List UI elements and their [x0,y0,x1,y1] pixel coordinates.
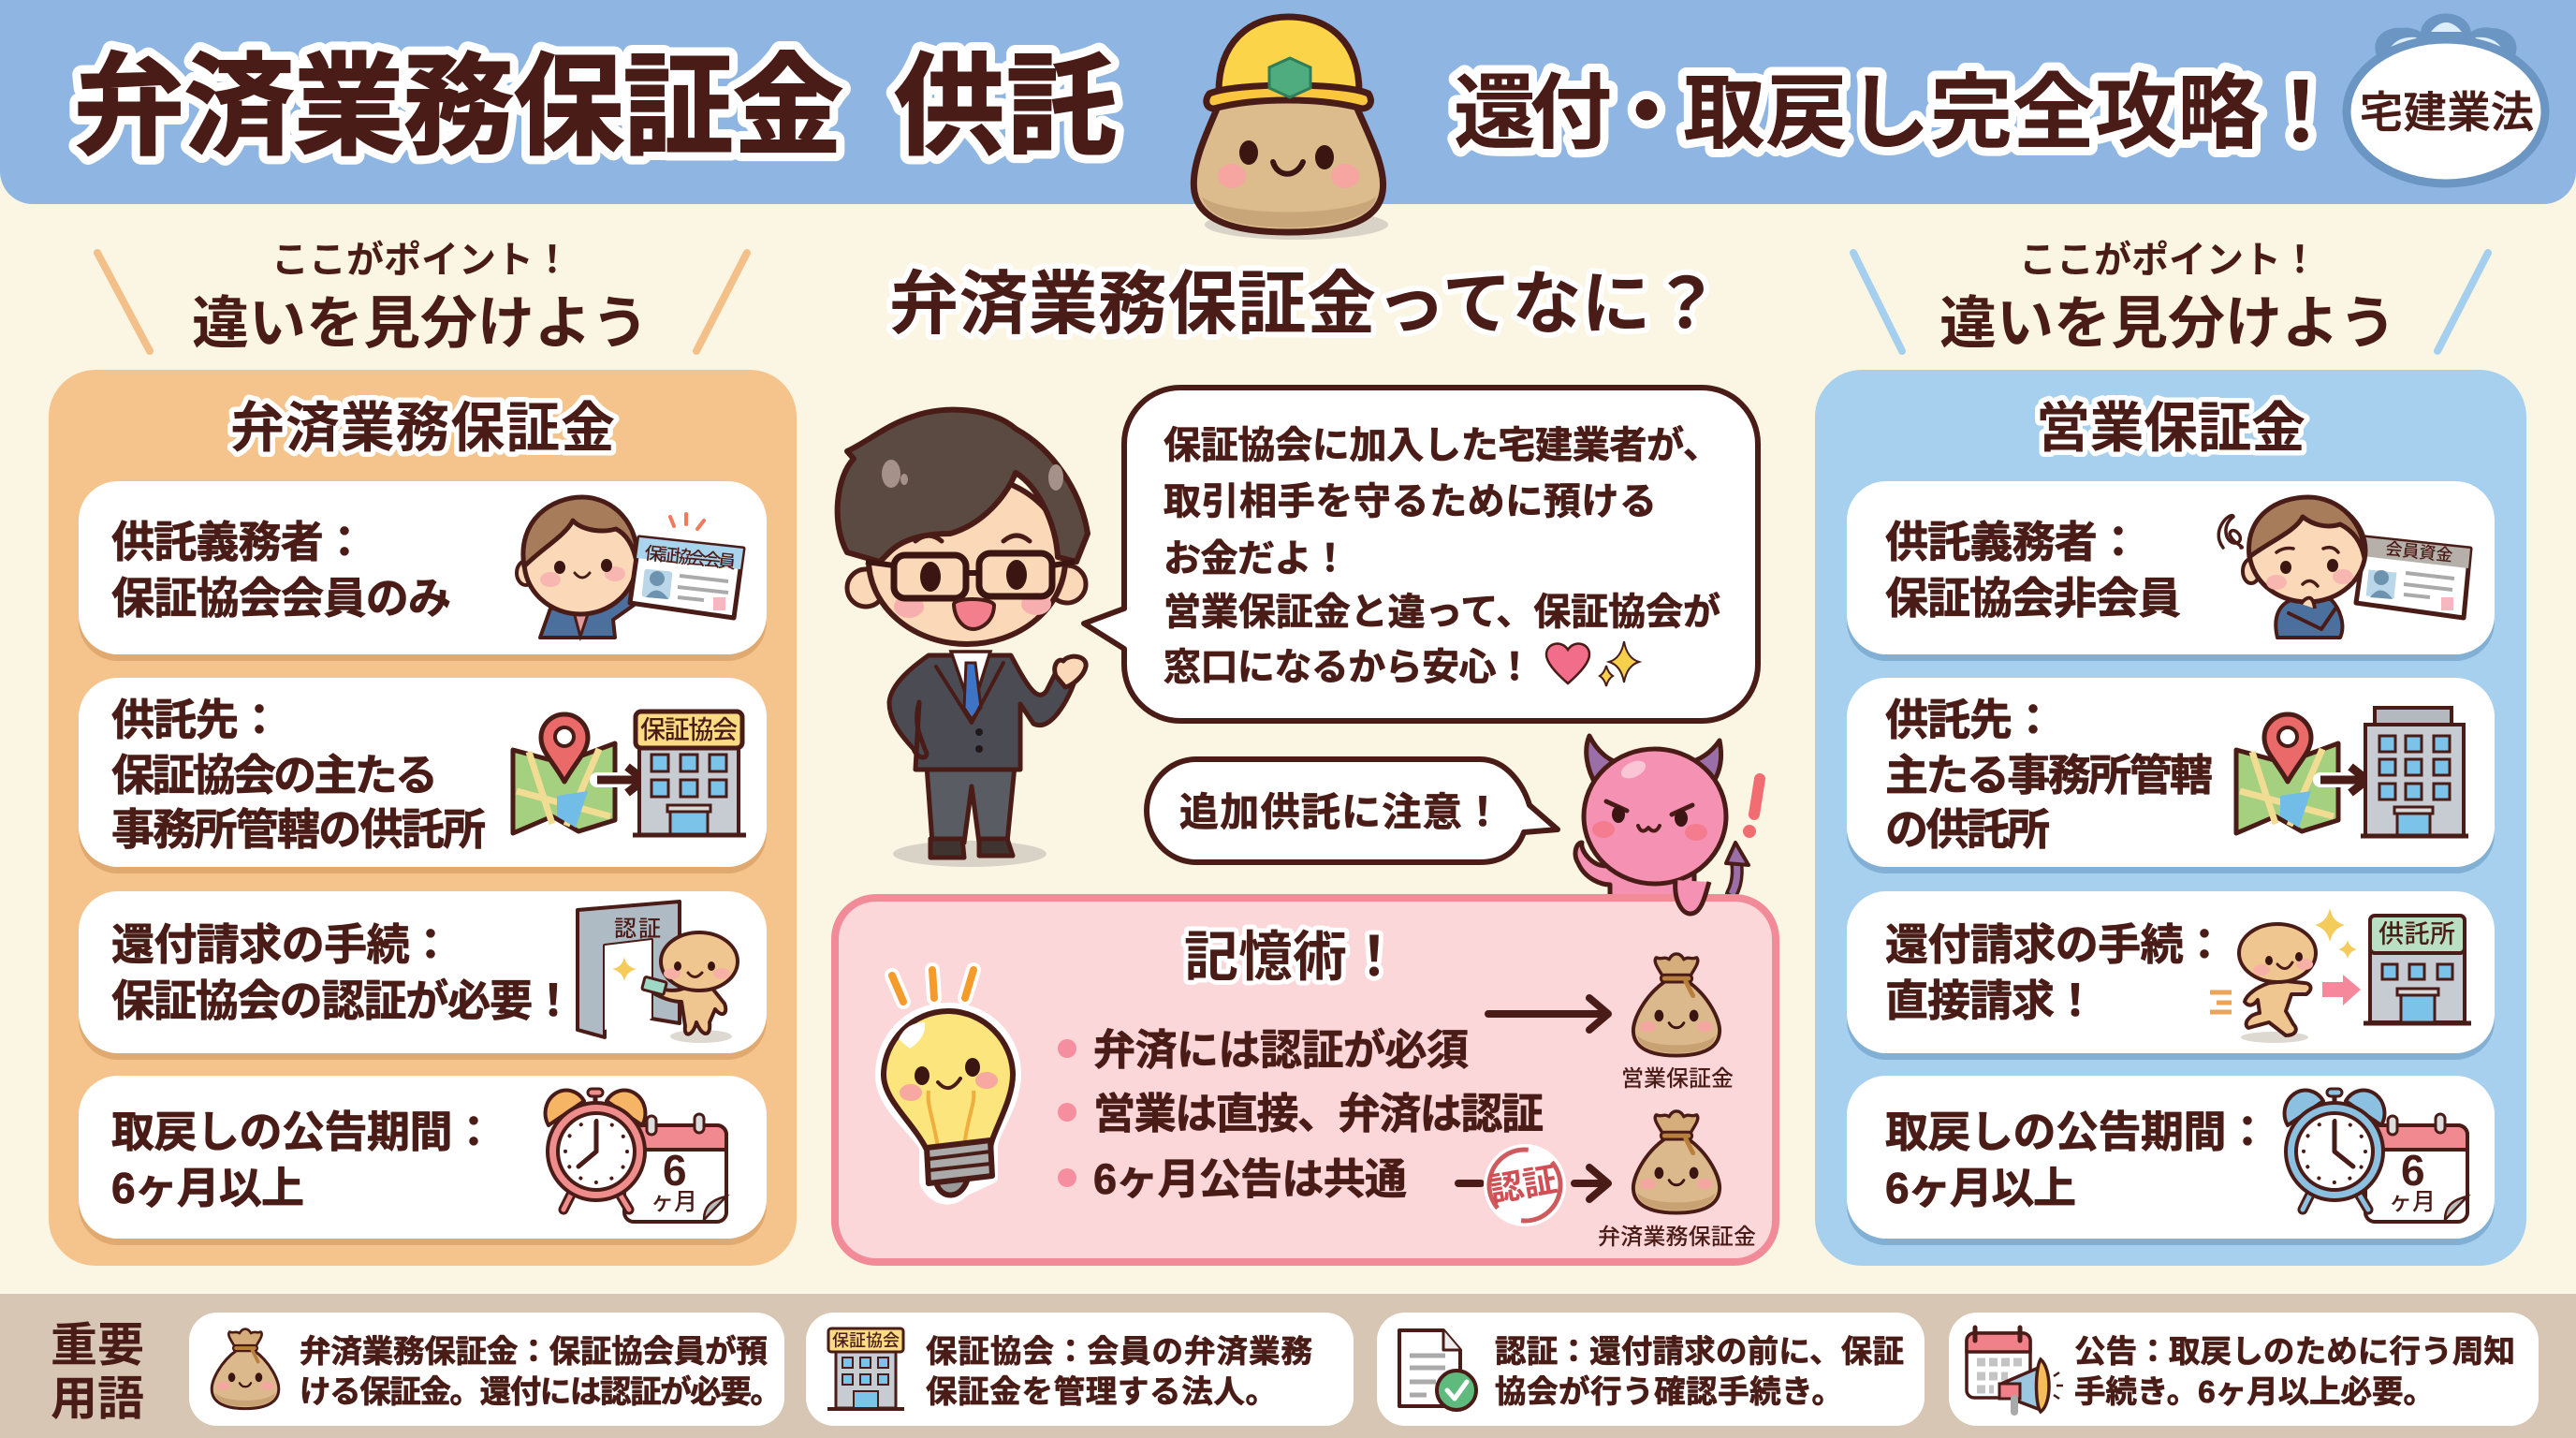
panel: 弁済業務保証金 [49,370,797,1266]
icon: money bag 営業保証金 [1633,954,1720,1056]
card: 供託先 [1847,678,2495,873]
header band [0,0,2576,204]
glossary card: 公告 [1949,1313,2539,1426]
icon: member holding card: 保証協会会員 [643,543,737,573]
glossary card: 認証: 認証：還付請求の前に、保証 [1495,1335,1904,1370]
stamp: 認証 [1474,1135,1575,1236]
card: 供託先 [79,678,767,873]
icon: money bag 弁済業務保証金 [1633,1111,1720,1213]
character: pink devil [1575,736,1760,899]
glossary card: 保証協会: 保証協会：会員の弁済業務 [926,1335,1312,1370]
card: 還付請求: 還付請求の手続： [1885,920,2226,969]
icon: 保証協会 building: 保証協会 [640,716,738,744]
icon: 保証協会 building [633,712,746,835]
arrow to 営業保証金 [1488,998,1608,1030]
icon: worried person with card: 会員資金 [2385,539,2453,565]
speech bubble: explanation: 営業保証金と違って、保証協会が [1164,592,1720,633]
panel heading: 営業保証金 [2036,398,2305,459]
card: 供託義務者: 供託義務者： [111,518,366,566]
right point heading [1853,240,2488,355]
arrow through 認証 stamp [1458,1167,1608,1199]
bullet list [1058,1026,1544,1203]
icon: calendar [2365,1114,2467,1222]
glossary card: 弁済業務保証金: 弁済業務保証金：保証協会員が預 [300,1334,768,1370]
icon: building [827,1328,904,1409]
card: 供託先: 事務所管轄の供託所 [111,805,486,854]
speech bubble: explanation: お金だよ！ [1164,538,1349,580]
icon: worried person with card [2218,497,2470,638]
right point heading: ここがポイント！ [2019,240,2319,281]
icon: authentication gate: 認証 [614,917,661,942]
bullet list: 弁済には認証が必須 [1093,1026,1469,1074]
badge: 宅建業法: 宅建業法 [2360,88,2534,137]
title: 弁済業務保証金 供託: 弁済業務保証金 [74,46,843,169]
icon: document with check [1399,1330,1476,1410]
speech bubble: explanation: 取引相手を守るために預ける [1164,481,1657,522]
footer heading: 重要用語 [51,1319,144,1425]
speech bubble: 追加供託に注意 [1147,759,1558,862]
icon: person running to 供託所: 供託所 [2378,920,2455,948]
card: 供託義務者: 保証協会非会員 [1885,574,2181,623]
left point heading: ここがポイント！ [271,240,571,281]
icon: heart [1546,644,1589,683]
memory heading: 記憶術！ [1184,927,1401,988]
icon: office building [2361,708,2468,836]
card: 還付請求: 直接請求！ [1885,976,2097,1025]
card: 取戻し: 取戻しの公告期間： [111,1108,495,1156]
card: 取戻し: 取戻しの公告期間： [1885,1108,2269,1156]
card: 取戻し: 6ヶ月以上 [111,1164,304,1212]
glossary card: 保証協会 [806,1313,1354,1426]
subtitle: 還付・取戻し完全攻略: 取戻し完全攻略！ [1683,66,2342,159]
subtitle: 還付・取戻し完全攻略: 還付・ [1454,66,1688,159]
footer heading: 重要用語: 用語 [51,1372,144,1425]
card: 供託先: 供託先： [111,696,281,744]
footer heading: 重要用語: 重要 [51,1319,144,1372]
card: 供託先: 供託先： [1885,696,2055,744]
card: 還付請求: 還付請求の手続： [111,920,452,969]
glossary card: 公告: 公告：取戻しのために行う周知 [2074,1335,2515,1370]
glossary card: 保証協会: 保証金を管理する法人。 [926,1375,1277,1410]
icon: money bag [212,1329,279,1409]
icon: calendar and megaphone [1967,1328,2063,1412]
speech bubble: explanation [1084,388,1758,721]
center heading: 弁済業務保証金ってなに？ [889,265,1720,343]
label: 営業保証金: 営業保証金 [1621,1066,1734,1092]
card: 還付請求 [1847,891,2495,1060]
left point heading [97,240,747,355]
card: 供託義務者 [79,481,767,661]
stamp: 認証: 認証 [1486,1160,1559,1210]
icon: building: 保証協会 [832,1331,900,1350]
card: 供託義務者: 供託義務者： [1885,518,2140,566]
title: 弁済業務保証金 供託: 弁済業務保証金 [74,46,843,169]
title: 弁済業務保証金 供託: 供託 [894,46,1117,169]
left point heading: 違いを見分けよう [192,291,649,355]
icon: person running to 供託所 [2210,908,2471,1043]
icon: member holding card [517,497,743,638]
panel: 営業保証金 [1815,370,2526,1266]
icon: sparkles [1600,641,1639,686]
glossary card: 弁済業務保証金: ける保証金。還付には認証が必要。 [300,1374,782,1410]
bullet list: 営業は直接、弁済は認証 [1093,1090,1544,1137]
mascot: money bag with helmet [1193,17,1388,240]
card: 還付請求: 保証協会の認証が必要！ [111,976,575,1025]
icon: map and pin [2236,714,2367,833]
title: 弁済業務保証金 供託: 供託 [894,46,1117,169]
icon: alarm clock [546,1089,645,1210]
icon: calendar: 6 [2401,1146,2425,1195]
icon: alarm clock [2285,1089,2384,1210]
speech bubble: 追加供託に注意: 追加供託に注意！ [1179,790,1502,834]
card: 供託先: の供託所 [1885,805,2050,854]
footer band [0,1294,2576,1438]
card: 供託義務者: 保証協会会員のみ [111,574,451,623]
bullet list: 6ヶ月公告は共通 [1093,1155,1407,1203]
badge: 宅建業法 [2347,13,2545,183]
speech bubble: explanation: 窓口になるから安心！ [1164,647,1533,688]
card: 取戻し [79,1076,767,1245]
speech bubble: explanation: 保証協会に加入した宅建業者が、 [1164,425,1720,466]
icon: authentication gate [578,902,738,1043]
card: 供託義務者 [1847,481,2495,661]
glossary card: 認証: 協会が行う確認手続き。 [1495,1374,1843,1410]
panel: 記憶術 [835,898,1776,1262]
glossary card: 公告: 手続き。6ヶ月以上必要。 [2074,1375,2435,1410]
card: 還付請求 [79,891,767,1060]
glossary card: 弁済業務保証金 [189,1313,784,1426]
subtitle: 還付・取戻し完全攻略: 取戻し完全攻略！ [1683,66,2342,159]
right point heading: 違いを見分けよう [1939,291,2396,355]
icon: calendar: 6 [663,1146,687,1195]
card: 取戻し: 6ヶ月以上 [1885,1164,2076,1212]
glossary card: 認証 [1377,1313,1925,1426]
devil hand over panel [1676,880,1709,914]
icon: calendar [624,1114,726,1222]
icon: calendar: ヶ月 [651,1189,697,1215]
subtitle: 還付・取戻し完全攻略: 還付・ [1454,66,1688,159]
icon: lightbulb [881,970,1016,1199]
card: 取戻し [1847,1076,2495,1245]
label: 弁済業務保証金: 弁済業務保証金 [1598,1225,1756,1250]
icon: map and pin [513,714,644,833]
card: 供託先: 保証協会の主たる [111,751,438,800]
card: 供託先: 主たる事務所管轄 [1885,751,2213,800]
panel heading: 弁済業務保証金 [230,398,615,459]
character: man in suit [838,410,1088,867]
icon: calendar: ヶ月 [2389,1189,2436,1215]
